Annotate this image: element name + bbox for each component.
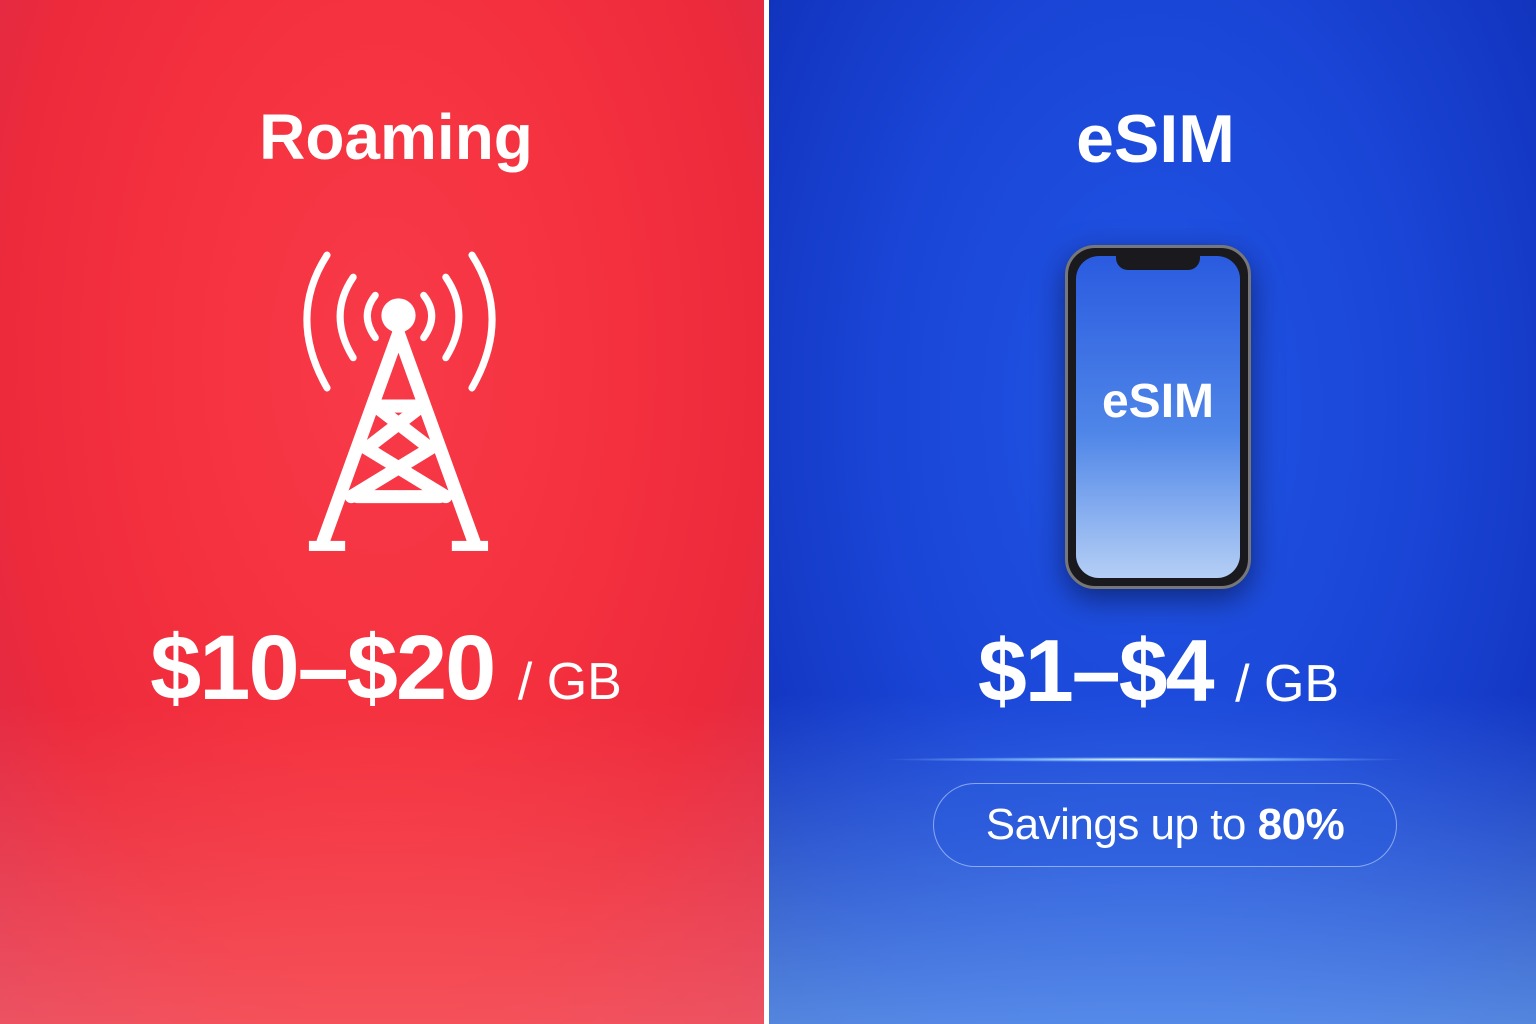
- icon: phone: [1065, 245, 1251, 589]
- panel: esim: [769, 0, 1536, 1024]
- price: roaming: $10–$20 / GB: [150, 617, 622, 719]
- panel: roaming: [0, 0, 764, 1024]
- glow line: [879, 757, 1409, 762]
- callout: savings: [933, 783, 1397, 867]
- title: Roaming: Roaming: [259, 101, 533, 173]
- callout: savings: Savings up to 80%: [986, 800, 1344, 849]
- phone label: eSIM: [1102, 375, 1214, 428]
- price: esim: $1–$4 / GB: [978, 621, 1339, 720]
- title: eSIM: eSIM: [1076, 101, 1235, 177]
- icon: cell tower: [303, 252, 496, 551]
